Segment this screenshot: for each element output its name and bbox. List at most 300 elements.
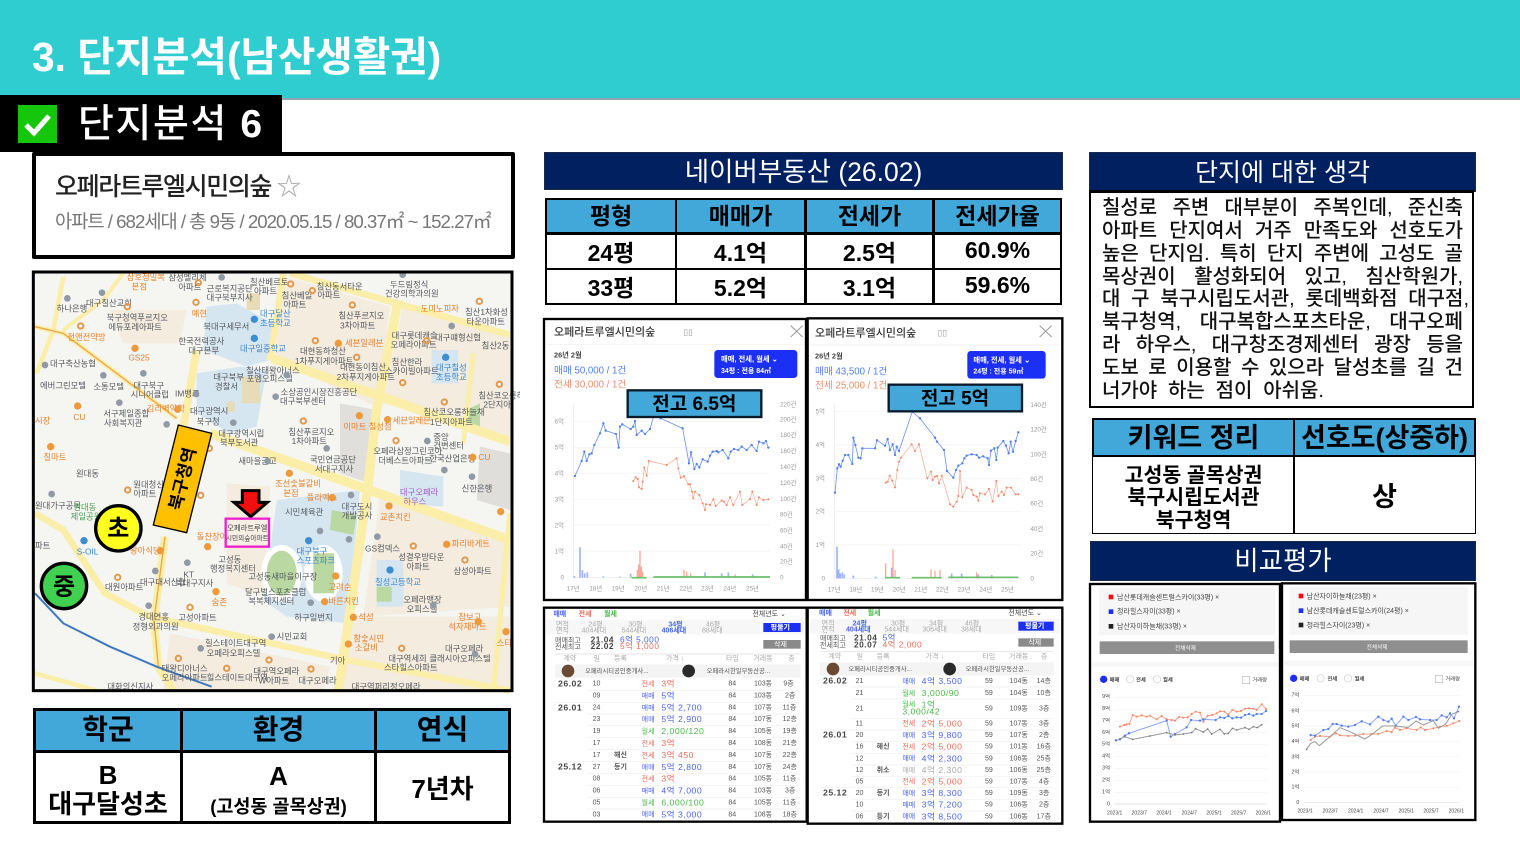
map place labels: GS25: [128, 353, 150, 363]
map place labels: 대현동하청산: [300, 346, 346, 356]
transaction table: 34평: 84: [728, 764, 736, 771]
map place labels: 시민체육관: [285, 507, 324, 517]
transaction table: 34평: 전세: [642, 750, 655, 759]
chart panel: 24평 price trend: 0: [1030, 575, 1034, 582]
map place labels: 서구제일종합: [103, 409, 150, 419]
map place labels: 오페라아파트: [162, 673, 208, 683]
transaction table: 34평: 평물기: [771, 622, 790, 631]
map place labels: 김리벽약학: [147, 404, 185, 414]
chart panel: 34평 price trend: 220건: [780, 399, 797, 408]
map place labels: 개발공사: [342, 511, 373, 521]
transaction table: 34평: 404세대: [582, 625, 606, 634]
transaction table: 34평: 거래동: [753, 654, 773, 663]
chart panel: 24평 price trend: 80건: [1030, 474, 1043, 483]
title: 3. 단지분석(남산생활권): [32, 34, 441, 80]
comparison chart: 33평: 청라힐스자이(33평) ×: [1117, 607, 1181, 616]
transaction table: 24평: 16: [856, 744, 864, 751]
transaction table: 34평: 88세대: [702, 625, 723, 634]
map place labels: 스카이빌아파트: [385, 366, 439, 376]
marker: 초 elementary school: 초: [107, 516, 129, 543]
transaction table: 24평: 10: [856, 802, 864, 809]
callout: 전고 5억: 전고 5억: [921, 387, 989, 409]
map place labels: 대구칠산교회: [86, 298, 132, 308]
comparison chart: 23평: 2024/7: [1373, 809, 1389, 815]
map place labels: 원대청산: [133, 479, 164, 489]
map place labels: 고성동새마을이구장: [248, 571, 318, 581]
transaction table: 24평: 106동: [1010, 754, 1028, 762]
map place labels: 대원아파트: [105, 582, 144, 592]
transaction table: 24평: 등기: [877, 811, 890, 820]
transaction table: 34평: 매매: [642, 811, 655, 819]
value: environment grade: A: [269, 760, 288, 790]
transaction table: 24평: 30평: [891, 619, 905, 628]
map place labels: 클래시아오피스텔: [429, 654, 491, 664]
chart panel: 24평 price trend: 100건: [1030, 449, 1047, 458]
complex details: 아파트 / 682세대 / 총 9동 / 2020.05.15 / 80.37㎡ ~ 152.27㎡: [55, 211, 491, 232]
transaction table: 34평: 5억: [661, 690, 675, 701]
header: 환경: 환경: [253, 714, 304, 744]
header: 키워드 정리: [1092, 418, 1295, 457]
comparison chart: 23평: 2024/1: [1348, 809, 1364, 815]
transaction table: 24평: 59: [985, 678, 993, 685]
transaction table: 34평: 전세: [579, 609, 592, 618]
map place labels: 고려순: [328, 582, 352, 592]
map place labels: 조선숯불갈비: [275, 479, 321, 489]
map place labels: 중앙: [433, 432, 449, 442]
map place labels: 대구칠성: [436, 363, 467, 373]
text block: thoughts on the complex: 너가야 하는 점이 아쉬움.: [1102, 380, 1324, 402]
transaction table: 34평: 84: [728, 705, 736, 712]
transaction table: 34평: 전세: [642, 738, 655, 747]
map place labels: 북구청: [197, 417, 220, 427]
transaction table: 24평: 3층: [1039, 718, 1050, 727]
map place labels: 행정복지센터: [210, 564, 256, 574]
map place labels: 아파트: [317, 290, 341, 300]
map place labels: 오페라삼정그린코아: [373, 446, 443, 456]
transaction table: 34평: 34평: [668, 620, 683, 629]
chart panel: 34평 price trend: 21년: [657, 584, 670, 593]
transaction table: 34평: 층: [788, 654, 795, 663]
transaction table: 24평: 59: [985, 802, 993, 809]
chart panel: 34평 price trend: 17년: [567, 584, 580, 593]
heading: 네이버부동산: 네이버부동산 (26.02): [685, 157, 922, 187]
transaction table: 34평: 5억 2,900: [661, 713, 702, 724]
transaction table: 24평: 매매: [902, 766, 915, 774]
map place labels: 칠마트: [43, 452, 67, 462]
comparison chart: 33평: 7억: [1102, 716, 1110, 724]
keywords list: 북구시립도서관: [1127, 486, 1260, 509]
marker: 중 middle school: 중: [53, 573, 75, 600]
transaction table: 24평: 25층: [1037, 753, 1051, 762]
transaction table: 24평: 3억 9,800: [922, 729, 963, 740]
transaction table: 34평: 107동: [754, 704, 773, 712]
transaction table: 34평: 월세: [604, 609, 617, 618]
heading: 비교평가: 비교평가: [1234, 546, 1332, 576]
transaction table: 24평: [806, 606, 1064, 825]
value: school grade: 대구달성초: [48, 789, 168, 819]
comparison chart: 33평: 2025/7: [1231, 810, 1247, 816]
comparison chart: 33평: 월세: [1163, 675, 1173, 683]
transaction table: 24평: 05: [856, 778, 864, 785]
transaction table: 34평: 일: [593, 654, 600, 663]
transaction table: 34평: 84: [728, 788, 736, 795]
chart panel: 34평 price trend: 오페라트루엘시민의숲: [554, 325, 655, 339]
map place labels: 근로복지공단: [207, 283, 253, 293]
comparison chart: 33평: 거래량: [1252, 676, 1267, 684]
map place labels: 대화의신지사: [107, 681, 154, 691]
transaction table: 24평: 59: [985, 732, 993, 739]
transaction table: 24평: 5억: [883, 633, 896, 643]
transaction table: 34평: 544세대: [622, 625, 646, 634]
map place labels: 대구역세희: [388, 654, 427, 664]
map place labels: KT: [183, 569, 194, 579]
transaction table: 24평: 104동: [1010, 689, 1028, 697]
transaction table: 34평: 5억 3,000: [661, 808, 702, 819]
map place labels: 대구대서신협: [140, 577, 186, 587]
map place labels: 아파트: [133, 489, 157, 499]
map place labels: 북대구지사: [175, 578, 214, 588]
transaction table: 24평: 3층: [1039, 788, 1050, 797]
map place labels: 소통모텔: [93, 381, 124, 391]
transaction table: 24평: 59: [985, 778, 993, 785]
chart panel: 34평 price trend: 140건: [780, 462, 797, 471]
text block: thoughts on the complex: 칠성로 주변 대부분이 주복인데, 준신축: [1102, 197, 1463, 219]
heading: 단지에 대한 생각: [1089, 152, 1476, 192]
chart panel: 24평 price trend: 3억: [816, 474, 825, 482]
transaction table: 24평: 21: [856, 690, 864, 697]
transaction table: 34평: 84: [728, 681, 736, 688]
transaction table: 24평: 타입: [982, 652, 995, 661]
transaction table: 34평: 24층: [783, 762, 797, 771]
map place labels: CU: [73, 412, 85, 422]
transaction table: 34평: 매매: [642, 787, 655, 795]
map place labels: 대구축산농협: [50, 359, 96, 369]
chart panel: 34평 price trend: 200건: [780, 415, 797, 424]
map place labels: [35, 272, 525, 691]
transaction table: 34평: 46평: [706, 620, 720, 629]
chart panel: 34평 price trend: 60건: [780, 525, 793, 534]
chart panel: 24평 price trend: 매매, 전세, 월세 ⌄: [973, 355, 1030, 364]
map place labels: 고성동: [218, 555, 242, 565]
transaction table: 24평: 3층: [1039, 703, 1050, 712]
header: 학군: 학군: [82, 714, 134, 744]
transaction table: 34평: 3억: [661, 678, 675, 689]
transaction table: 34평: 9층: [783, 679, 794, 688]
text block: thoughts on the complex: 목상권이 활성화되어 있고, 침산학원가,: [1102, 266, 1463, 288]
comparison chart: 23평: 전세: [1327, 674, 1337, 682]
map place labels: 삼성멜리체: [168, 273, 207, 283]
map place labels: 대구도시: [342, 501, 372, 511]
chart panel: 34평 price trend: 22년: [679, 584, 692, 593]
chart panel: 24평 price trend: 140건: [1030, 400, 1047, 409]
transaction table: 24평: 21: [856, 705, 864, 712]
comparison chart: 23평: 청라힐스자이(23평) ×: [1307, 620, 1370, 629]
transaction table: 34평: 24평: [588, 620, 603, 629]
chart panel: 24평 price trend: 0: [821, 575, 825, 582]
transaction table: 34평: 24: [593, 705, 601, 712]
row: 33평: 59.6%: [965, 272, 1030, 298]
marker: 초 elementary school: [96, 506, 141, 551]
comparison chart: 23평: 2023/7: [1323, 809, 1338, 815]
transaction table: 24평: 오페라시한일부동산공...: [966, 664, 1029, 673]
map place labels: 대현동이침산: [340, 362, 386, 372]
transaction table: 34평: 등기: [614, 762, 627, 771]
transaction table: 34평: 26.02: [558, 678, 582, 688]
comparison chart: 23평: 월세: [1355, 674, 1365, 682]
comparison chart: 23평: [1280, 582, 1476, 822]
map place labels: 소상공인시장진흥공단: [281, 387, 358, 397]
comparison chart: 23평: 3억: [1291, 752, 1299, 760]
transaction table: 34평: 매매최고: [555, 635, 581, 644]
transaction table: 24평: 24평: [853, 619, 867, 628]
map place labels: 왕아식당: [130, 545, 161, 555]
chart panel: 24평 price trend: 20년: [893, 584, 906, 593]
comparison chart: 33평: 남산롯데캐슬센트럴스카이(33평) ×: [1117, 592, 1219, 601]
transaction table: 34평: 계약: [563, 654, 577, 663]
transaction table: 34평: 107동: [754, 715, 773, 723]
chart panel: 24평 price trend: 23년: [958, 584, 971, 593]
header row: 전세가율: [955, 203, 1040, 229]
transaction table: 34평: 21.04: [591, 634, 614, 644]
map place labels: 사회복지관: [104, 418, 143, 428]
transaction table: 24평: 59: [985, 744, 993, 751]
transaction table: 24평: 4억 3,500: [922, 675, 963, 686]
map place labels: 시니어클럽: [131, 389, 169, 399]
transaction table: 34평: 84: [728, 693, 736, 700]
transaction table: 24평: 20: [856, 790, 864, 797]
transaction table: 24평: 삭제: [1028, 637, 1041, 646]
comparison chart: 33평: 2024/7: [1182, 810, 1197, 816]
map place labels: 삼호정밀복: [127, 272, 165, 282]
map place labels: 대구일중학교: [240, 344, 286, 354]
transaction table: 34평: 5억 1,000: [620, 641, 659, 651]
map place labels: 참보고: [458, 612, 482, 622]
map place labels: 포엠오피스텔: [247, 374, 293, 384]
transaction table: 34평: 17: [593, 740, 601, 747]
map place labels: 더베스트아파트: [378, 455, 432, 465]
comparison chart: 33평: 2025/1: [1206, 810, 1222, 816]
transaction table: 24평: 2억 5,000: [922, 775, 963, 786]
transaction table: 24평: 46평: [965, 619, 979, 628]
transaction table: 24평: 107동: [1010, 731, 1028, 739]
transaction table: 34평: 84: [728, 800, 736, 807]
transaction table: 34평: 2,000/120: [661, 726, 704, 736]
value: environment grade: (고성동 골목상권): [210, 796, 347, 816]
sports park: [261, 545, 302, 602]
map place labels: 침산2동: [482, 340, 510, 350]
transaction table: 34평: 103동: [754, 787, 773, 795]
transaction table: 34평: 4억 7,000: [661, 785, 702, 796]
map place labels: 힐스테이트대구역: [205, 638, 266, 648]
chart panel: 24평 price trend: 오페라트루엘시민의숲: [815, 325, 916, 339]
transaction table: 34평: 11층: [783, 774, 797, 783]
chart panel: 24평 price trend: 24년: [979, 584, 992, 593]
row: 33평: [545, 270, 1062, 305]
table: keywords and preference: [1092, 418, 1476, 534]
map place labels: 대구달산: [260, 309, 291, 319]
price line: sale: [575, 412, 768, 476]
callout: 전고 5억: [889, 385, 1022, 411]
transaction table: 24평: 2층: [1039, 800, 1050, 809]
map place labels: 오페라아파트: [391, 340, 437, 350]
table: school, environment, age: [33, 708, 511, 824]
transaction table: 34평: 26.01: [558, 702, 582, 712]
transaction table: 34평: 22층: [783, 750, 797, 759]
transaction table: 34평: 면적: [556, 625, 569, 634]
transaction table: 24평: 계약: [828, 652, 842, 661]
comparison chart: 33평: 2023/7: [1132, 810, 1147, 816]
transaction table: 34평: 09: [593, 693, 601, 700]
map place labels: 2차푸지게아파트: [337, 372, 395, 382]
callout: 전고 6.5억: [628, 390, 761, 417]
comparison chart: 23평: 2023/1: [1297, 809, 1313, 815]
transaction table: 24평: 가격 ↓: [926, 652, 944, 661]
map place labels: 침산코오롱하늘채: [423, 407, 485, 417]
header row: 매매가: [709, 203, 772, 229]
map place labels: 침산푸르지오: [338, 310, 385, 320]
transaction table: 34평: 103동: [754, 692, 773, 700]
map place labels: 대구북부: [213, 372, 244, 382]
row: 24평: 4.1억: [714, 240, 767, 266]
comparison chart: 23평: 2026/1: [1449, 809, 1464, 815]
arrow: location pointer: [234, 491, 267, 517]
chart panel: 24평 price trend: 20건: [1030, 549, 1043, 558]
map place labels: 오페라맹장: [403, 595, 442, 605]
map place labels: 돌찬장어: [197, 531, 227, 541]
transaction table: 24평: 10층: [1037, 688, 1051, 697]
chart panel: 34평 price trend: 20년: [634, 584, 647, 593]
map place labels: 대구오페라: [400, 487, 439, 497]
transaction table: 34평: 5억 2,700: [661, 702, 702, 713]
map place labels: 두드림정식: [390, 279, 428, 289]
text block: thoughts on the complex: 아파트 단지여서 거주 만족도와 선호도가: [1102, 220, 1463, 242]
transaction table: 24평: 25층: [1037, 765, 1051, 774]
callout: 북구청역: 북구청역: [165, 446, 200, 512]
transaction table: 24평: 3,000/90: [922, 688, 959, 698]
transaction table: 24평: 1억: [922, 698, 935, 709]
map place labels: 건변센터: [433, 440, 464, 450]
comparison chart: 33평: 8억: [1102, 704, 1110, 712]
map place labels: 원대동: [76, 469, 99, 479]
map place labels: CU: [478, 452, 490, 462]
map place labels: 본점: [283, 488, 299, 498]
transaction table: 34평: 11층: [783, 703, 797, 712]
transaction table: 24평: 3억 7,200: [922, 799, 963, 810]
transaction table: 34평: 84: [728, 811, 736, 818]
comparison chart: 23평: 4억: [1291, 737, 1299, 745]
campus zones: [197, 303, 458, 623]
beige city blocks: [110, 277, 510, 691]
transaction table: 24평: 취소: [877, 765, 890, 774]
trade volume bars: [837, 547, 1018, 578]
trade volume bars: [574, 547, 770, 578]
chart panel: 34평 price trend: 26년 2월: [554, 351, 582, 360]
value: school grade: B: [99, 760, 117, 790]
map place labels: W아파트: [258, 675, 290, 685]
header row: 전세가: [838, 203, 901, 229]
map place labels: 석성: [358, 612, 374, 622]
transaction table: 24평: 매매: [819, 608, 832, 617]
transaction table: 24평: 전세최고: [820, 640, 846, 649]
chart panel: 34평 price trend: 18년: [589, 584, 602, 593]
map place labels: 시민교회: [277, 631, 307, 641]
map place labels: 칠산베르토: [250, 277, 289, 287]
map place labels: 스타힐스아파트: [384, 663, 438, 673]
value: environment grade: [181, 751, 376, 823]
transaction table: 34평: 등록: [614, 655, 627, 663]
transaction table: 24평: 매매: [902, 813, 915, 821]
map place labels: 침산푸르지오: [288, 427, 335, 437]
transaction table: 24평: 306세대: [922, 624, 947, 633]
transaction table: 24평: 106동: [1010, 812, 1028, 820]
map place labels: 오피스텔: [407, 604, 438, 614]
comparison chart: 23평: 6억: [1291, 706, 1299, 714]
map place labels: 3차아파트: [340, 320, 376, 330]
map place labels: GS컴덱스: [365, 544, 400, 554]
complex location label: 오페라트루엘: [227, 524, 268, 533]
transaction table: 24평: 전세: [843, 608, 856, 617]
chart panel: 34평 price trend: 160건: [780, 446, 797, 455]
transaction table: 24평: 3억 8,500: [922, 810, 963, 821]
map place labels: 숨존: [212, 597, 227, 607]
map place labels: 신한은행: [462, 484, 492, 494]
comparison chart: 33평: 4억: [1102, 751, 1110, 759]
chart panel: 34평 price trend: 34평 : 전용 84㎡: [721, 366, 771, 375]
transaction table: 24평: 404세대: [846, 624, 871, 633]
map place labels: 한국전력공사: [178, 336, 225, 346]
text block: thoughts on the complex: 도보 로 이용할 수 있으라 달성초를 길 건: [1102, 357, 1463, 379]
table: prices: [545, 198, 1062, 305]
transaction table: 24평: 101동: [1010, 743, 1028, 751]
map place labels: 대구퍠형신협: [435, 333, 481, 343]
map place labels: 삼성아파트: [453, 566, 492, 576]
keywords list: 북구청역: [1156, 509, 1231, 532]
chart panel: 24평 price trend: 60건: [1030, 499, 1043, 508]
chart panel: 24평 price trend: 25년: [1001, 584, 1014, 593]
transaction table: 24평: 월세: [868, 608, 881, 617]
heading: 네이버부동산: [544, 152, 1063, 190]
map place labels: 한국산업은행: [429, 454, 475, 464]
map place labels: 대구본부: [188, 345, 219, 355]
map place labels: 초등학교: [436, 372, 467, 382]
map place labels: IM뱅크: [175, 389, 200, 399]
map place labels: 1단지아파트: [430, 417, 473, 427]
transaction table: 34평: 3억 450: [661, 749, 694, 760]
panel: complex summary: [32, 152, 515, 259]
map place labels: 북대구세무서: [203, 321, 249, 331]
transaction table: 24평: 14층: [1037, 676, 1051, 685]
transaction table: 34평: 21층: [783, 738, 797, 747]
roads: [35, 273, 510, 691]
transaction table: 24평: 면적: [822, 619, 835, 628]
value: school grade: [34, 751, 182, 823]
transaction table: 34평: 108동: [754, 739, 773, 747]
transaction table: 34평: 27: [593, 764, 601, 771]
chart panel: 34평 price trend: 5억: [555, 443, 564, 451]
map place labels: 아파트: [283, 299, 307, 309]
transaction table: 24평: 전세: [902, 742, 915, 751]
transaction table: 24평: 59: [985, 690, 993, 697]
map place labels: 파리바게트: [452, 539, 490, 549]
row: 24평: 2.5억: [843, 240, 896, 266]
map place labels: 복복체지센터: [248, 596, 294, 606]
map place labels: 북부도서관: [220, 437, 259, 447]
map place labels: 북구청역푸르지오: [107, 313, 168, 323]
map place labels: 2단지아: [483, 399, 511, 409]
chart panel: 34평 price trend: 19년: [612, 584, 625, 593]
transaction table: 24평: 107동: [1010, 777, 1028, 785]
callout: 전고 6.5억: 전고 6.5억: [652, 393, 736, 415]
